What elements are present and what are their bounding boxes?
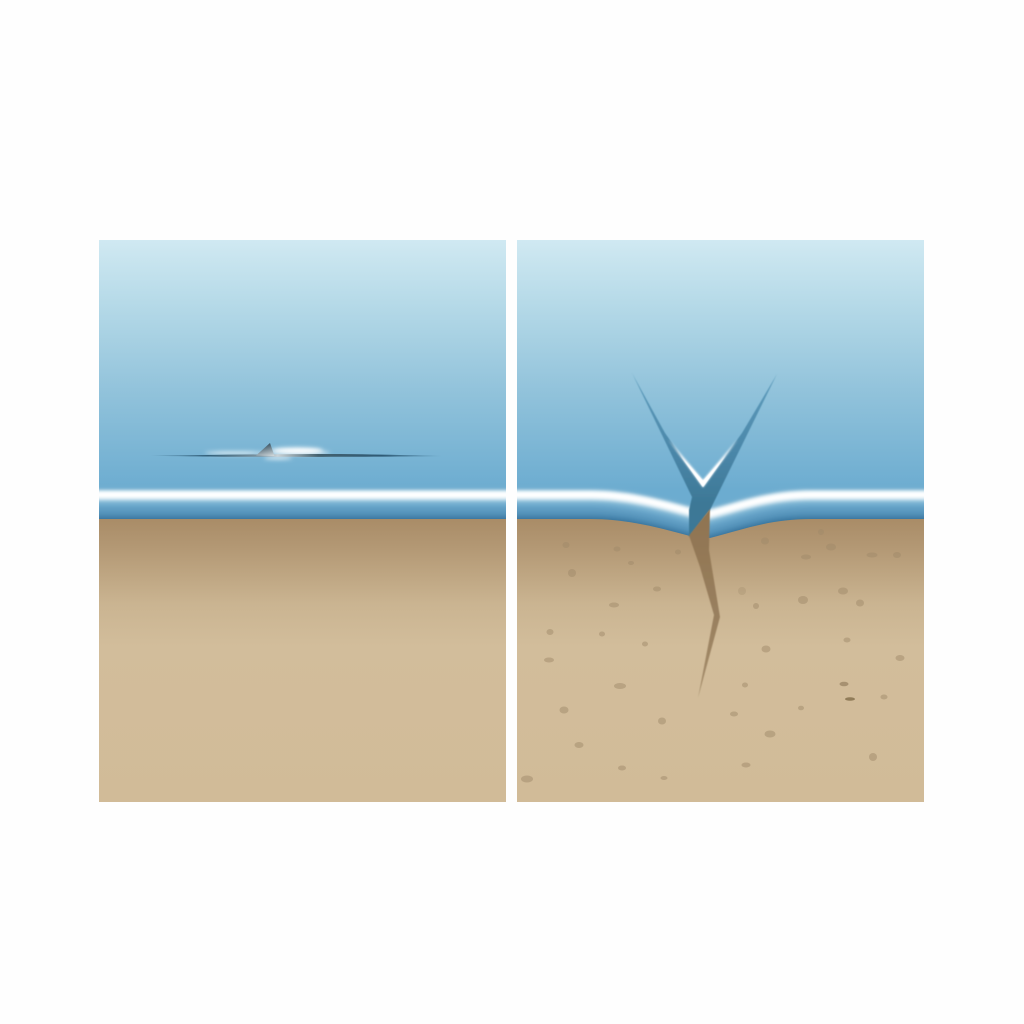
V-shaped fissure in the water	[632, 373, 777, 537]
left sand	[99, 519, 506, 802]
left surface slit with small fin	[150, 443, 442, 459]
panel: left, intact surface	[99, 240, 506, 802]
right bright shoreline band, dipping to the crack	[517, 488, 924, 538]
panel: right, cracked surface	[517, 240, 924, 802]
right water body	[517, 240, 924, 506]
right sand	[517, 519, 924, 802]
sand pebbles	[521, 529, 904, 782]
illustration: two cross-section panels	[99, 240, 924, 802]
left bright shoreline band	[99, 488, 506, 519]
left water body	[99, 240, 506, 500]
crack in the sand	[689, 509, 720, 698]
